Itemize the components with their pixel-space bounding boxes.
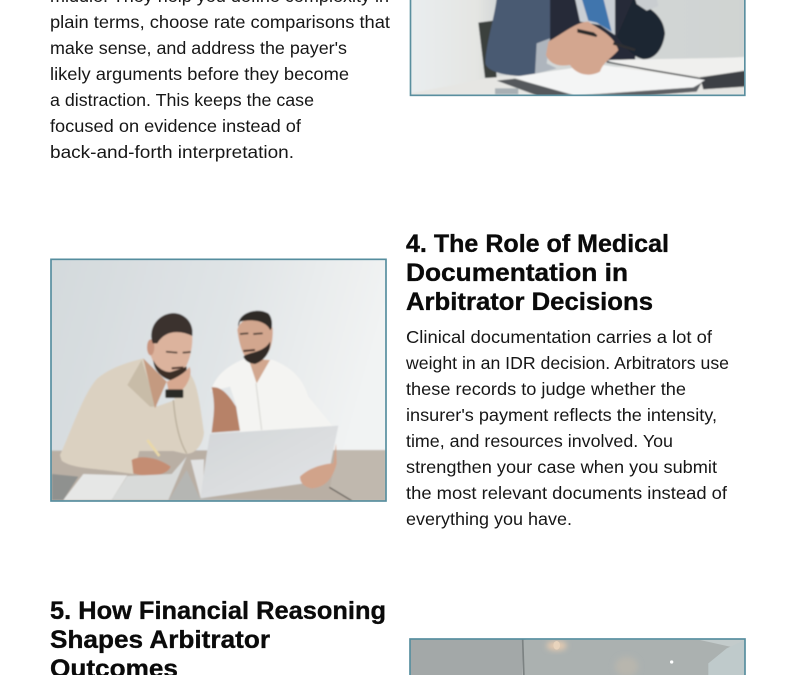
section 3 body text: a distraction. This keeps the case xyxy=(50,90,314,110)
photo: two men reviewing a laptop xyxy=(51,259,386,501)
heading: section 5: Shapes Arbitrator xyxy=(50,626,270,654)
left man shirt xyxy=(60,358,204,474)
section 4 body text: Clinical documentation carries a lot of xyxy=(406,327,712,347)
section 4 body text: time, and resources involved. You xyxy=(406,431,673,451)
section 3 body text xyxy=(50,0,390,162)
left man head and hand xyxy=(150,331,193,374)
heading: section 4: Arbitrator Decisions xyxy=(406,288,653,316)
right man head xyxy=(236,319,274,356)
heading: section 5 xyxy=(50,597,386,675)
right man shirt xyxy=(211,359,308,432)
section 4 body text: the most relevant documents instead of xyxy=(406,483,727,503)
section 3 body text: back-and-forth interpretation. xyxy=(50,142,294,162)
section 4 body text xyxy=(405,327,729,529)
section 4 body text: weight in an IDR decision. Arbitrators use xyxy=(405,353,729,373)
heading: section 4 xyxy=(406,230,669,316)
section 3 body text: plain terms, choose rate comparisons that xyxy=(50,12,390,32)
heading: section 5: 5. How Financial Reasoning xyxy=(50,597,386,625)
section 3 body text: make sense, and address the payer's xyxy=(50,38,347,58)
table xyxy=(52,450,352,500)
right hand xyxy=(300,443,337,488)
photo: office interior, top edge visible xyxy=(410,639,745,675)
heading: section 4: 4. The Role of Medical xyxy=(406,230,669,258)
section 4 body text: these records to judge whether the xyxy=(406,379,686,399)
section 3 body text: focused on evidence instead of xyxy=(50,116,301,136)
section 4 body text: strengthen your case when you submit xyxy=(406,457,717,477)
section 4 body text: insurer's payment reflects the intensity, xyxy=(406,405,717,425)
heading: section 4: Documentation in xyxy=(406,259,628,287)
section 3 body text: likely arguments before they become xyxy=(50,64,349,84)
laptop xyxy=(191,459,204,498)
notebook xyxy=(63,474,127,500)
section 4 body text: everything you have. xyxy=(406,509,572,529)
photo: businessman in suit at desk with pen xyxy=(410,0,745,97)
